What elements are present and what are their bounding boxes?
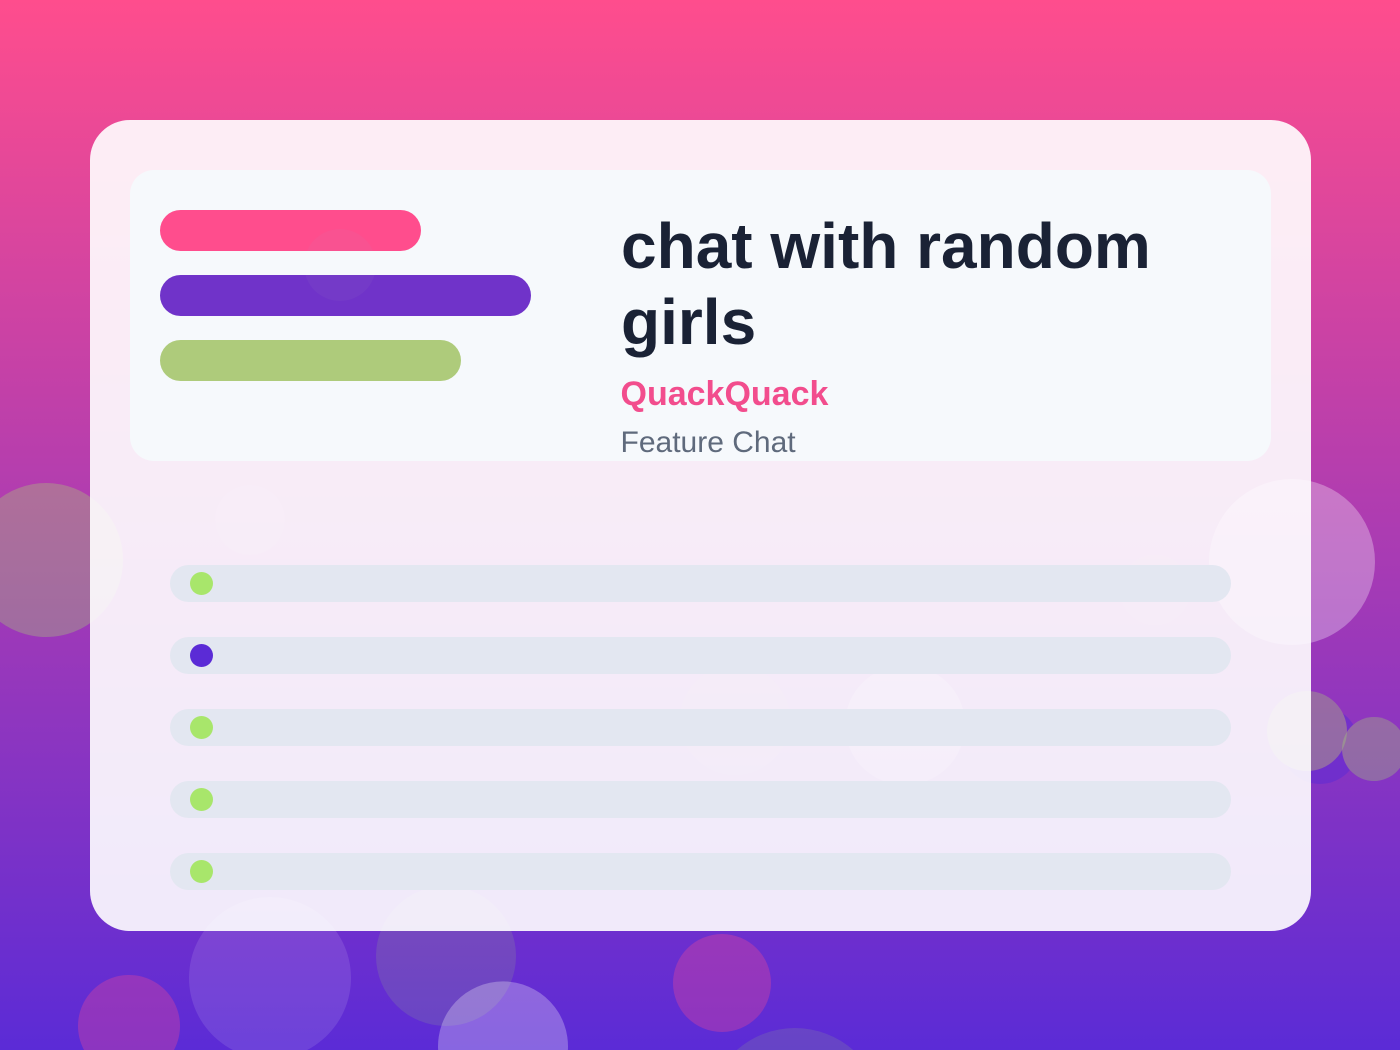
title: girls <box>621 286 756 358</box>
purple bar <box>160 275 531 316</box>
subtitle: Feature Chat <box>620 426 796 458</box>
list row 2 <box>170 637 1231 674</box>
brand name: QuackQuack <box>620 375 828 413</box>
pink bar <box>160 210 421 251</box>
green bar <box>160 340 461 381</box>
list row 4 <box>170 781 1231 818</box>
title: chat with random <box>621 210 1151 282</box>
list row 3 <box>170 709 1231 746</box>
list row 5 <box>170 853 1231 890</box>
title <box>621 210 1151 358</box>
list row 1 <box>170 565 1231 602</box>
card <box>90 120 1311 931</box>
background circles <box>0 481 1400 1050</box>
panel: header <box>130 170 1271 461</box>
